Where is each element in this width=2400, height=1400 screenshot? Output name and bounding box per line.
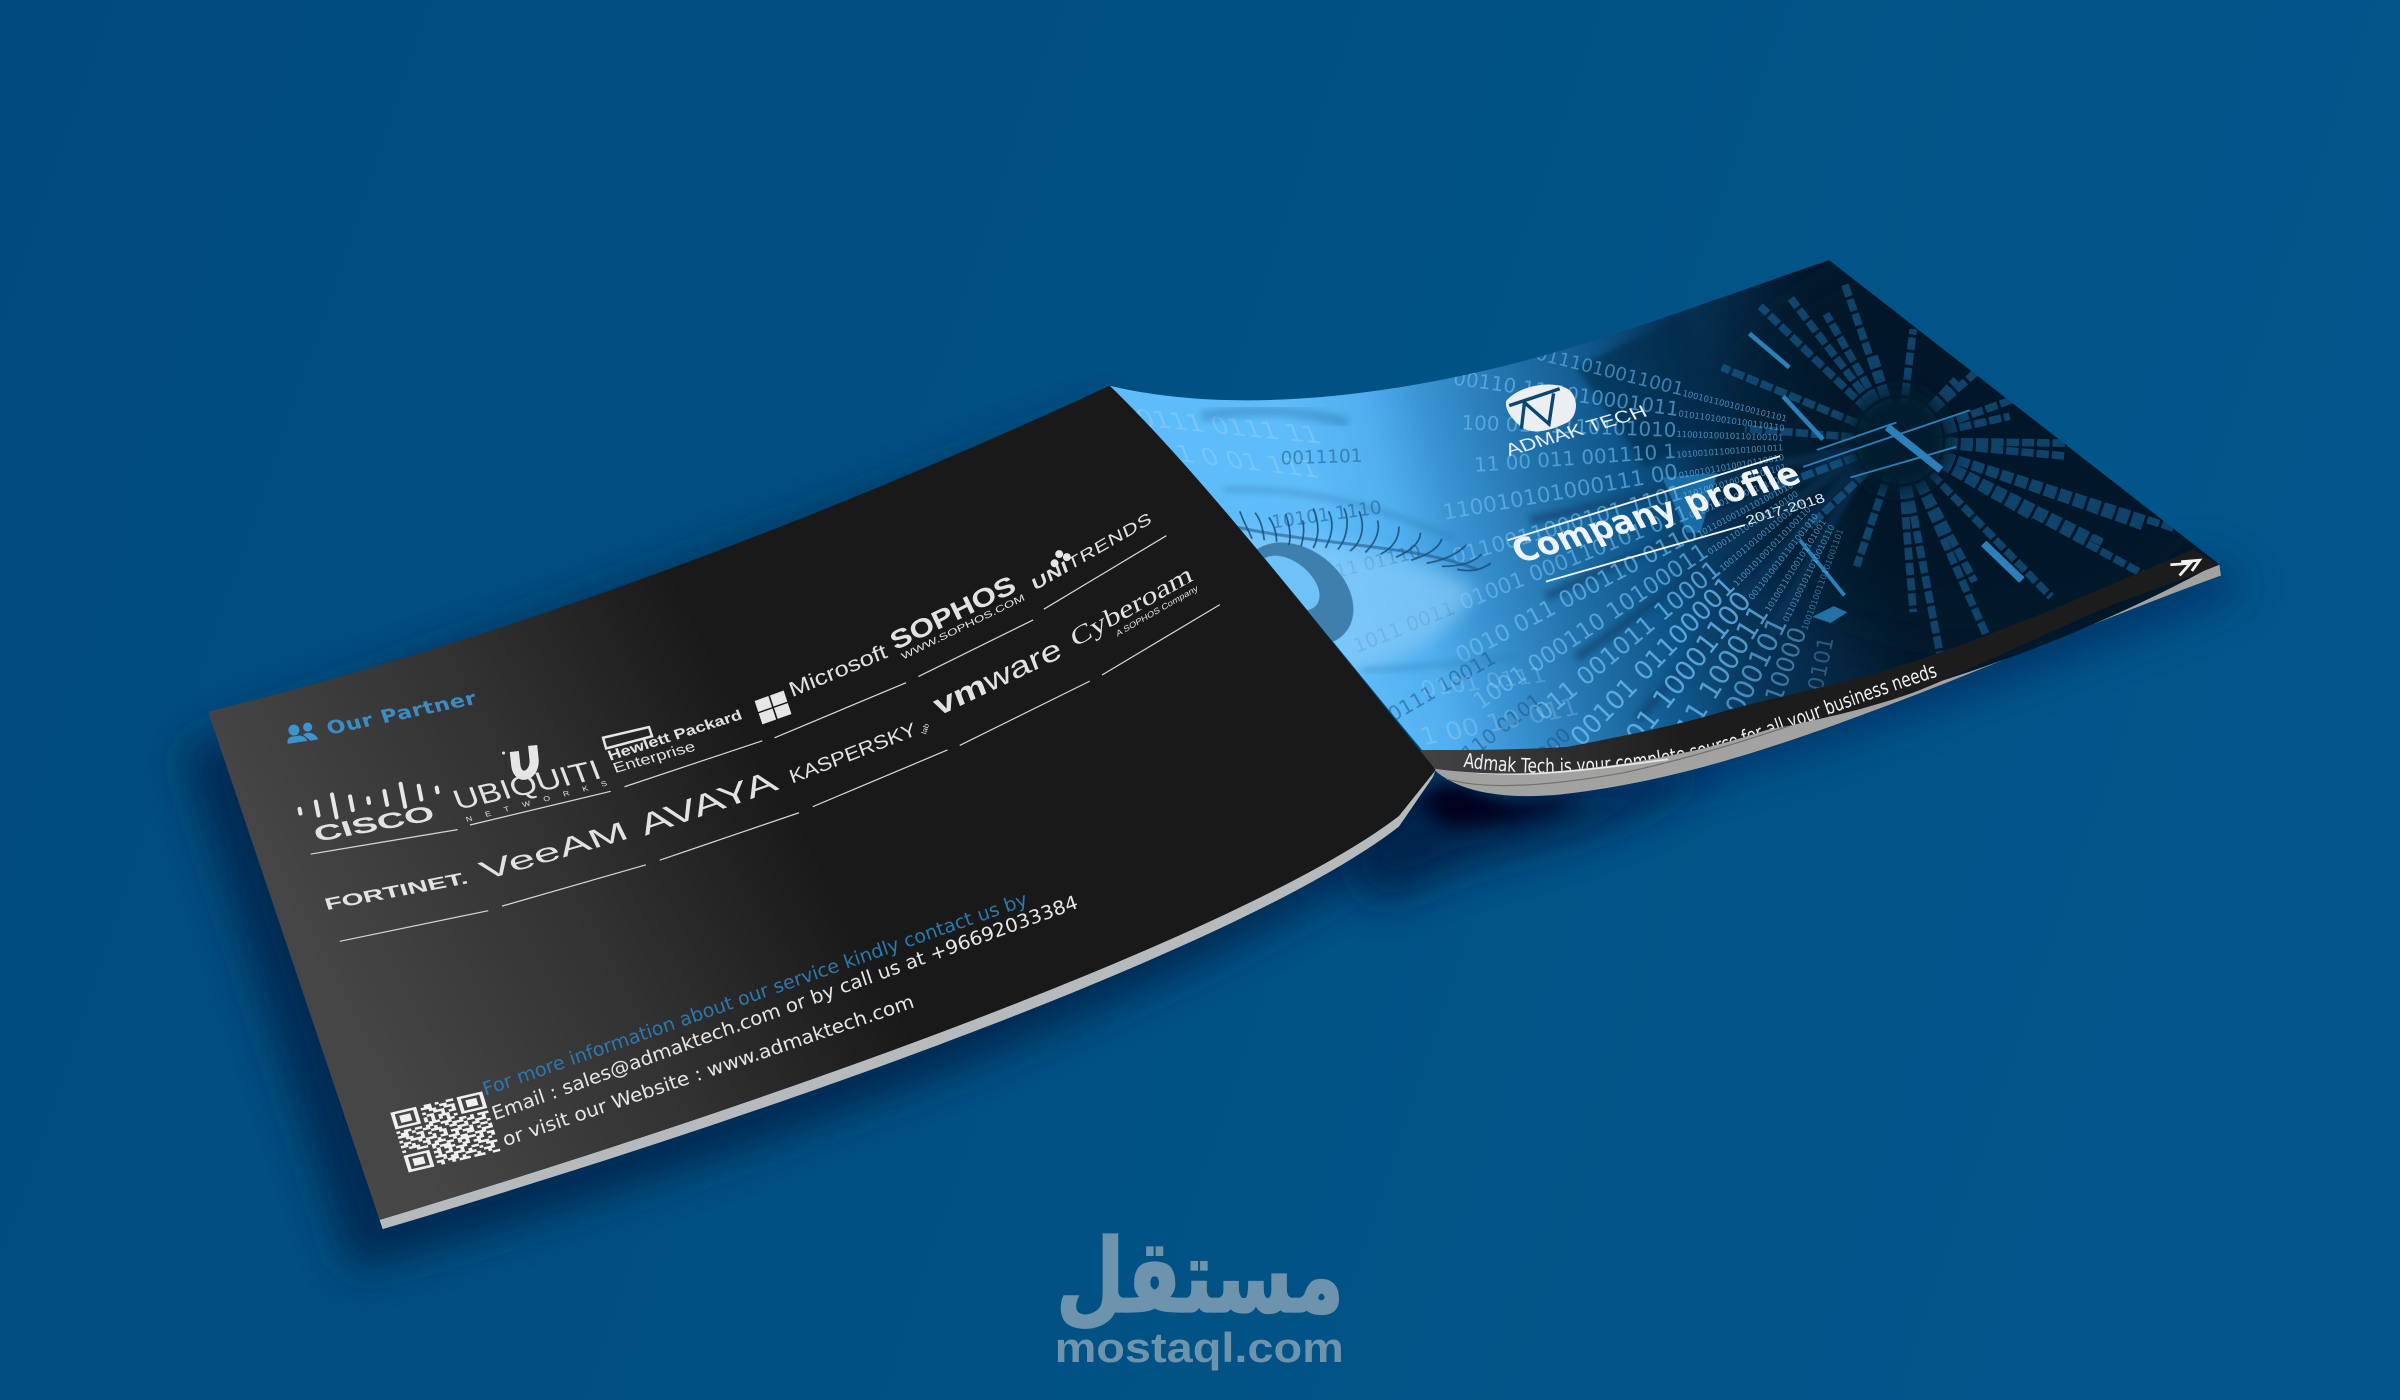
unitrends text: UNITRENDS [1030,509,1154,595]
windows icon [755,691,791,724]
binary digit fan: 01001 000110101 011 [1456,501,1693,616]
dark region at right [1710,278,2188,620]
binary digit fan: 01 0011 100011 [1628,599,1775,810]
faint digits near the spine: 0101 0111 [1417,663,1549,702]
ubiquiti text: UBIQUITI [449,754,605,816]
binary digit fan: 1 00101 01100001 [1548,571,1742,770]
logo wordmark: ADMAK TECH [1502,402,1651,460]
contact block [391,888,1081,1171]
tagline: Admak Tech is your complete source for all your business needs [1463,664,1937,773]
icon: people [287,722,318,744]
watermark latin wordmark: mostaql.com [1055,1325,1344,1371]
logo: Fortinet: FORTINET. [322,870,470,914]
lower lid [1362,657,1515,670]
eye illustration [1202,411,1515,673]
dark digits on the bright area: 0011101 [1280,446,1363,470]
binary digit fan: 11001010010110100101 [1676,429,1783,443]
QR code [391,1093,500,1171]
sophos text: SOPHOS [885,570,1020,656]
cisco bars [298,778,439,823]
logo underlines [311,536,1220,941]
cyberoam tagline: A SOPHOS Company [1115,583,1200,639]
logo: Unitrends [1030,509,1154,595]
binary digit fan: 1100101000111010011001 [1431,318,1686,401]
binary digit fan: 100 010 1110101010 [1461,411,1677,442]
panel: cover bottom band [1420,550,2220,774]
light beams [1749,334,2022,595]
dark digits on the bright area: 1110101 0011 [1231,360,1367,395]
binary digit fan: 0010 011 000110 0110 [1452,520,1702,669]
kaspersky lab mark: lab [920,722,931,735]
logo: Kaspersky [787,719,931,788]
enterprise text: Enterprise [611,739,698,776]
binary digit fan: 0101 10000 [1735,623,1813,772]
ubiquiti icon [502,745,534,775]
page stack: right curl [1433,565,2221,796]
binary digit fan: 00110 11 1010001011 [1452,367,1680,421]
binary digit fan: 01101001011010010110 [1781,523,1837,623]
binary digit fan: 0110011000101 1101 [1449,480,1685,570]
sophos url: WWW.SOPHOS.COM [900,592,1027,662]
logo mark letters [1509,389,1560,429]
faint digits near the spine: 1 00 10 011 [1416,693,1583,752]
binary digit fan: 10010100110101001101 [1799,527,1845,631]
heading: Our Partner [287,687,479,744]
date range: 2017-2018 [1744,491,1827,528]
panel: front cover [1110,260,2218,750]
watermark: Mostaql [1055,1218,1344,1371]
logo: Cyberoam [1067,560,1200,653]
binary digit fan: 011 001011 10001 [1529,554,1726,726]
logo: Sophos [885,570,1027,662]
server blocks fan [1722,283,2173,658]
binary digit fan: 10010110100101001011 [1718,497,1806,573]
logo: Admak Tech [1502,384,1651,460]
pupil highlight [1264,556,1320,610]
binary digit fan: 01011010010100110110 [1678,408,1785,433]
logo: Avaya: AVAYA [633,764,783,842]
title: Company profile: Company profile [1504,454,1807,571]
binary digit fan: 11001010010110100110 [1731,504,1813,588]
binary digit fan: 110010101000111 00 [1441,460,1680,526]
panel: back cover [208,386,1436,1220]
dark streaks between digit rows [1528,445,1862,722]
upper eyelid crease [1224,489,1454,539]
kaspersky text: KASPERSKY [787,719,919,788]
binary digit fan: 00110100101101001010 [1746,511,1820,602]
binary digit fan: 0011 01 10001100 [1571,585,1758,812]
binary digit fan: 11010010100110100101 [1682,461,1787,501]
title rule top [1508,456,1780,540]
watermark Arabic wordmark: مستقل [1056,1218,1344,1336]
dark panel behind logo [1576,324,1694,467]
hpe rectangle [603,727,652,748]
binary digit fan: 1110 0101 [1791,635,1839,753]
networks text: NETWORKS [465,779,608,824]
dark digits on the bright area: 00011 01110 [1299,541,1423,591]
sclera highlight [1224,528,1477,673]
binary digit fan: 01001101001010110100 [1706,489,1800,557]
unitrends dots [1051,550,1071,567]
dark digits on the bright area: 0111 10011 [1384,646,1500,726]
faint digits near the spine [1132,405,1583,752]
binary digit fan: 11 00 011 001110 1 [1473,440,1677,477]
binary digit fan: 01001011010010110010 [1678,452,1785,480]
page stack: left side [380,770,1436,1229]
binary digit fan: 10110100101101001010 [1696,480,1795,539]
binary digit fan: 10100110100101101001 [1763,518,1828,614]
blue panel behind title [1662,473,1717,533]
dark digits on the bright area: 10101 1110 [1270,497,1383,534]
binary digit fan: 10100101100101001011 [1676,442,1784,460]
binary digit fan: 1 0010 000101 [1673,612,1794,815]
iris [1257,542,1354,642]
logo mark [1506,384,1576,431]
binary digit fan [1444,352,1844,748]
binary digit fan: 1001 000110 10100011 [1469,539,1713,715]
logo: Cisco [298,778,439,847]
website line: or visit our Website : www.admaktech.com [499,990,917,1151]
faint digits near the spine: 11 0 01 111 [1155,438,1323,484]
dark digits on the bright area: 111000 [1505,723,1576,793]
logo: Ubiquiti [449,745,608,824]
center dark hub [1847,389,1952,493]
binary digit fan: 10010110010100101101 [1682,388,1788,424]
dark digits on the bright area: 1011 0011 [1350,596,1458,658]
cisco text: CISCO [310,801,438,847]
contact heading line: For more information about our service kindly contact us by [480,888,1030,1100]
microsoft text: Microsoft [786,640,891,702]
dark digits on the bright area [1272,448,1570,750]
cyberoam text: Cyberoam [1067,560,1196,653]
dark digits on the bright area: 1110 0101 [1448,689,1546,773]
soft shadow under brochure [184,413,2250,1270]
email and phone line: Email : sales@admaktech.com or by call us at +96692033384 [489,891,1081,1125]
logo: Veeam: VeeAM [475,816,633,886]
logo: Hewlett Packard Enterprise [603,707,744,776]
blue glints [1812,606,1847,623]
faint digits near the spine: 0111 0111 11 [1132,405,1325,450]
eyelashes [1240,508,1491,571]
heading text: Our Partner [323,687,479,739]
eyelid edge [1234,527,1477,569]
logo: Microsoft [755,640,891,724]
eyebrow shadow [1202,411,1347,422]
logo: VMware: vmware [929,633,1066,723]
title rule bottom [1546,525,1745,582]
binary digit fan: 00101101001011010010 [1688,471,1791,520]
hpe text: Hewlett Packard [605,707,744,764]
icon: double arrow [2170,560,2199,576]
